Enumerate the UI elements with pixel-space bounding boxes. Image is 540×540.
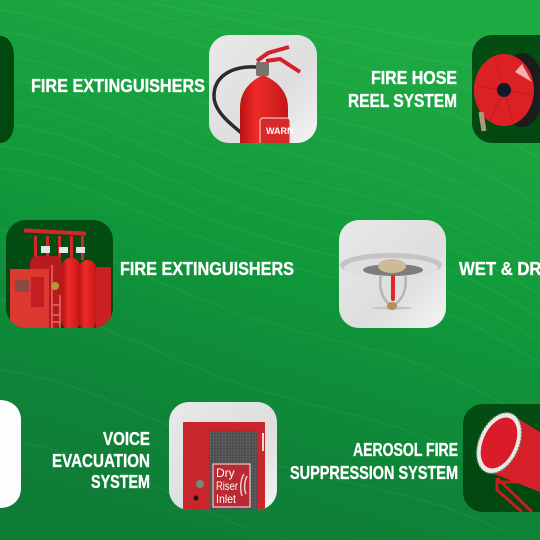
icon: manifold: [24, 228, 86, 260]
tile: portable fire extinguisher: [209, 35, 317, 148]
heading: fire hose reel system: [348, 67, 457, 111]
icon: mesh window: [209, 431, 257, 510]
icon: hose coil: [514, 53, 540, 127]
icon: ladder pipe: [52, 265, 60, 328]
tile: gas cylinders: [6, 220, 113, 330]
label: dry riser inlet sign: [213, 464, 250, 507]
tile: fire hose reel: [472, 35, 540, 143]
icon: cylinders: [30, 256, 111, 330]
heading: voice evacuation system: EVACUATION: [52, 450, 150, 471]
icon: sprinkler escutcheon: [340, 253, 442, 277]
icon: cabinet lock: [194, 433, 264, 500]
icon: extinguisher body: [240, 75, 288, 143]
icon: red glass bulb: [391, 275, 395, 301]
icon: control cabinet: [10, 269, 49, 328]
heading: fire hose reel system: FIRE HOSE: [371, 67, 457, 88]
tile: cropped dark tile, top left: [0, 36, 14, 143]
heading: aerosol fire suppression system: AEROSOL FIRE: [353, 439, 458, 460]
icon: deflector: [372, 302, 412, 310]
tile: aerosol generator: [463, 404, 540, 512]
icon: extinguisher valve: [256, 62, 269, 76]
icon: reel hub: [497, 83, 511, 97]
label: warning plate: WARN: [266, 126, 294, 136]
label: dry riser inlet sign: Dry: [216, 466, 235, 480]
icon: reel disc: [474, 54, 534, 126]
heading: voice evacuation system: VOICE: [103, 428, 150, 449]
heading: voice evacuation system: SYSTEM: [91, 471, 150, 492]
icon: sprinkler frame: [380, 275, 406, 306]
heading: fire extinguishers top: FIRE EXTINGUISHERS: [31, 75, 205, 96]
tile: dry riser cabinet: [169, 402, 277, 510]
icon: mount bracket: [497, 478, 540, 512]
icon: gauges: [41, 246, 85, 253]
icon: sprinkler socket: [363, 264, 423, 276]
label: dry riser inlet sign: Inlet: [216, 492, 237, 506]
icon: cabinet door: [183, 422, 265, 510]
icon: extinguisher handles: [257, 47, 300, 72]
icon: generator face: [476, 412, 522, 474]
icon: extinguisher hose: [214, 67, 256, 144]
heading: fire hose reel system: REEL SYSTEM: [348, 90, 457, 111]
heading: aerosol fire suppression system: SUPPRESSION SYSTEM: [290, 462, 458, 483]
icon: brass nozzle: [481, 112, 484, 131]
icon: generator barrel: [492, 415, 540, 492]
heading: fire extinguishers middle: FIRE EXTINGUISHERS: [120, 258, 294, 279]
tile: cropped white tile, bottom left: [0, 400, 21, 508]
label: dry riser inlet sign: Riser: [216, 479, 238, 493]
heading: voice evacuation system: [52, 428, 150, 492]
tile: sprinkler: [339, 220, 446, 328]
heading: aerosol fire suppression system: [290, 439, 458, 483]
